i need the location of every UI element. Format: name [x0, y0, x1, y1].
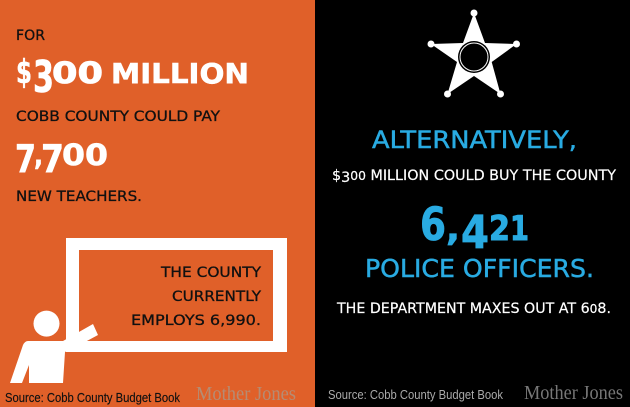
heading: $300 million: 3	[33, 52, 54, 103]
number: 7,700	[15, 137, 108, 181]
logo: mother jones: Mother Jones	[196, 383, 296, 405]
number: 6,421: 1	[510, 209, 529, 249]
heading: $300 million	[16, 52, 249, 103]
text: for: FOR	[16, 28, 45, 44]
text: could buy: MILLION COULD BUY THE COUNTY	[370, 168, 610, 184]
heading: police officers: POLICE OFFICERS.	[365, 254, 594, 283]
icon: teacher	[10, 311, 98, 383]
number: 6,421: ,	[446, 209, 460, 249]
chalkboard text: EMPLOYS 6,990.	[131, 313, 261, 329]
heading: $300 million: MILLION	[111, 57, 249, 90]
number: 6,421: 2	[489, 209, 510, 249]
heading: alternatively: ALTERNATIVELY,	[372, 126, 577, 154]
text: could buy: 3	[341, 170, 350, 186]
number: 7,700: ,	[34, 139, 43, 172]
chalkboard text: THE COUNTY	[160, 265, 261, 281]
text: cobb county could pay: COBB COUNTY COULD PAY	[16, 109, 220, 125]
heading: $300 million: 00	[52, 56, 103, 90]
number: 7,700: 7	[15, 137, 36, 181]
chalkboard text: CURRENTLY	[172, 289, 261, 305]
text: could buy: $	[332, 168, 341, 184]
heading: $300 million: $	[16, 52, 32, 91]
number: 6,421: 6	[420, 198, 446, 251]
number: 6,421: 4	[461, 206, 489, 259]
icon: sheriff star	[428, 10, 520, 98]
panel: police	[315, 0, 630, 407]
chalkboard text	[131, 265, 261, 329]
number: 6,421	[420, 198, 529, 259]
text: could buy: 00	[350, 169, 366, 183]
source: Source: Cobb County Budget Book	[5, 391, 181, 405]
text: department max: THE DEPARTMENT MAXES OUT AT 6 08.	[336, 301, 611, 317]
number: 7,700: 7	[41, 137, 64, 181]
source: Source: Cobb County Budget Book	[328, 388, 504, 402]
logo: mother jones: Mother Jones	[524, 382, 623, 404]
number: 7,700: 00	[62, 138, 108, 172]
icon: chalkboard	[66, 238, 287, 352]
panel: teachers	[0, 0, 315, 407]
text: new teachers: NEW TEACHERS.	[16, 189, 142, 205]
